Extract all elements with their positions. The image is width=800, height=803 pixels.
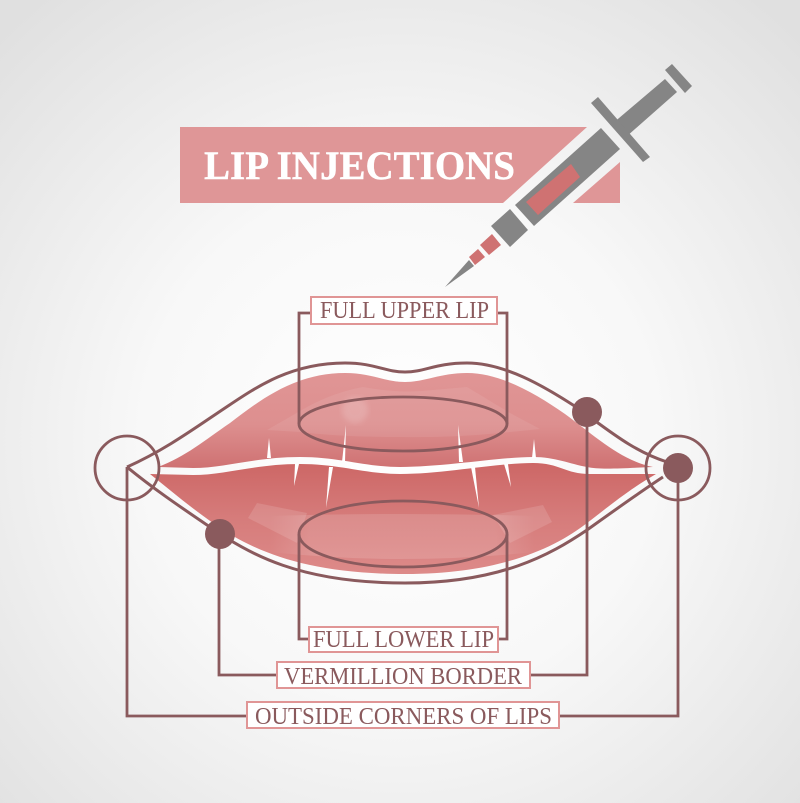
vermillion outline (127, 363, 667, 583)
label: full lower lip: FULL LOWER LIP (313, 627, 494, 653)
corners connector (127, 467, 678, 716)
upper lip ellipse and bracket (299, 313, 507, 451)
title banner (180, 127, 620, 203)
left corner circle (95, 436, 159, 500)
title: LIP INJECTIONS (204, 143, 515, 188)
lower lip ellipse and bracket (299, 501, 507, 639)
label: outside corners of lips: OUTSIDE CORNERS OF LIPS (255, 704, 552, 730)
upper lip (158, 373, 653, 469)
icon: syringe (445, 64, 692, 287)
lip highlights (267, 387, 540, 437)
label: full upper lip: FULL UPPER LIP (320, 298, 489, 324)
label: vermillion border: VERMILLION BORDER (284, 664, 522, 690)
marker dots (205, 397, 693, 549)
right corner circle (646, 436, 710, 500)
lips (150, 373, 656, 574)
vermillion border connector (219, 412, 587, 675)
lip creases (267, 425, 536, 508)
lower lip (150, 463, 656, 574)
connector lines (95, 313, 710, 716)
